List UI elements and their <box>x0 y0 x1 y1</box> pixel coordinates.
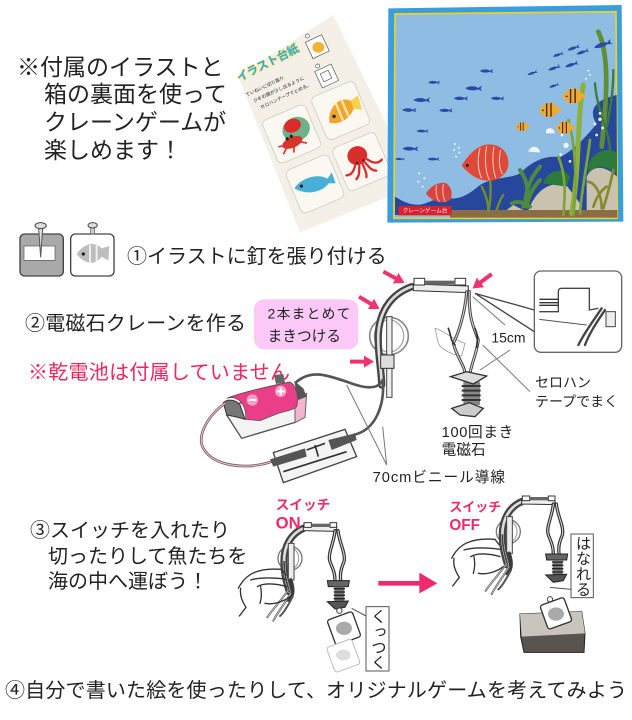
label: switch off: OFF <box>449 517 480 534</box>
small sample tiles <box>305 34 339 88</box>
attached illustration card <box>326 608 361 673</box>
crane held in hand <box>238 523 349 621</box>
step 3 text: 切ったりして魚たちを <box>48 545 247 568</box>
tile: crab <box>261 103 322 165</box>
blue fish school <box>395 39 613 161</box>
label: electromagnet: 100回まき <box>442 424 513 441</box>
label: 15cm: 15cm <box>491 330 526 346</box>
label: wrap with tape: テープでまく <box>535 394 618 410</box>
arrow: switch on to off <box>378 573 437 593</box>
yellow fish school <box>516 88 587 134</box>
big red fish <box>462 144 508 181</box>
callout: wind two together: 2本まとめて <box>268 307 350 322</box>
step 3 text: 海の中へ運ぼう！ <box>48 570 208 593</box>
label: switch on <box>276 497 330 533</box>
icon: nail taped to card <box>20 223 63 276</box>
label: vinyl wire: 70cmビニール導線 <box>373 469 505 486</box>
label: switch off: スイッチ <box>449 499 501 514</box>
tile: blue fish <box>284 153 346 215</box>
tile: octopus <box>331 131 392 192</box>
arrow: pink pointers <box>350 266 495 368</box>
label: electromagnet: 電磁石 <box>442 441 486 458</box>
game box reverse <box>387 5 623 223</box>
sheet instructions: セロハンテープでとめる。 <box>260 82 312 111</box>
sheet instructions: クギの頭が少し出るように <box>252 75 306 105</box>
label: electromagnet <box>442 424 513 458</box>
intro note: 箱の裏面を使って <box>44 81 227 107</box>
label: release: はなれる <box>573 535 591 597</box>
sheet instructions <box>245 65 312 114</box>
intro note <box>17 54 227 163</box>
crane held in hand <box>452 496 568 594</box>
illustration sheet <box>234 15 392 232</box>
leader lines <box>347 297 530 465</box>
step 2 text: ②電磁石クレーンを作る <box>25 312 246 335</box>
callout: wind two together: まきつける <box>268 328 341 345</box>
label: switch on: スイッチ <box>276 497 330 512</box>
label: stick: くっつく <box>369 609 386 670</box>
step 3 text <box>30 519 247 593</box>
label: wrap with tape: セロハン <box>535 374 591 390</box>
callout: wind two together <box>254 299 358 349</box>
step 1 text: ①イラストに釘を張り付ける <box>127 245 387 268</box>
battery holder <box>223 374 307 438</box>
sea floor rocks <box>395 95 617 215</box>
sponge block with card <box>520 597 585 652</box>
switch off diagram <box>449 496 593 652</box>
switch on diagram <box>238 497 389 673</box>
step 2 crane assembly diagram <box>201 266 622 486</box>
step 4 text: ④自分で書いた絵を使ったりして、オリジナルゲームを考えてみよう <box>5 679 627 702</box>
box label <box>398 206 452 215</box>
battery warning: ※乾電池は付属していません <box>28 361 290 384</box>
intro note: ※付属のイラストと <box>17 54 224 80</box>
electromagnet coil <box>451 372 487 417</box>
bubbles and jellyfish <box>417 70 604 188</box>
inset detail <box>475 271 622 352</box>
crane arm and wires <box>370 278 478 397</box>
connecting wires <box>201 374 383 466</box>
switch board <box>270 429 357 483</box>
tile: butterflyfish <box>310 80 371 141</box>
seaweed <box>482 32 613 215</box>
label: stick <box>352 607 389 671</box>
step 3 text: ③スイッチを入れたり <box>30 519 230 542</box>
label: wrap with tape <box>535 374 618 410</box>
label: switch off <box>449 499 501 534</box>
label: release <box>550 534 593 598</box>
box label: クレーンゲーム台 <box>403 207 448 215</box>
icon: fish card with nail <box>71 223 114 276</box>
label: switch on: ON <box>276 514 301 533</box>
sheet instructions: ていねいに切り取り <box>245 74 286 98</box>
small red fish <box>426 183 452 202</box>
intro note: クレーンゲームが <box>44 109 226 135</box>
sheet title: イラスト台紙 <box>234 41 302 84</box>
intro note: 楽しめます！ <box>44 137 182 163</box>
